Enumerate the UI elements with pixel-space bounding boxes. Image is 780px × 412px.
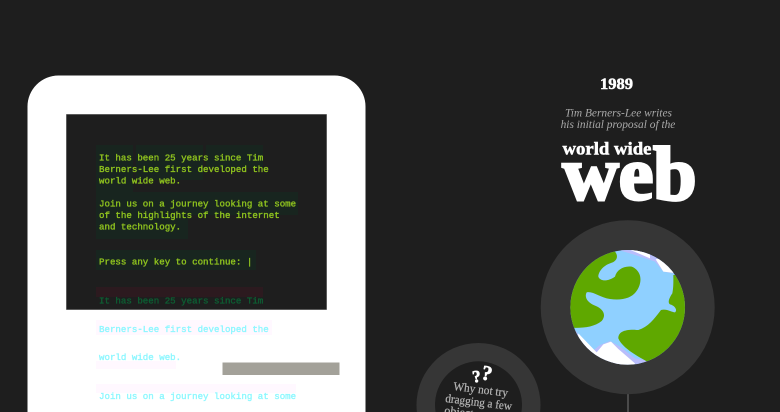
ghost text below screen: world wide web. [99, 352, 181, 363]
ghost text below screen [96, 320, 296, 402]
ghost text below screen: Berners-Lee first developed the [99, 324, 269, 335]
panel: retro computer monitor [28, 76, 366, 412]
icon: question marks [471, 360, 495, 387]
title: world wide web: web [562, 132, 696, 216]
screen intro text: It has been 25 years since Tim [99, 152, 264, 164]
screen intro text: Berners-Lee first developed the [99, 164, 269, 175]
screen intro text [99, 152, 296, 268]
callout text [444, 379, 513, 412]
globe ring [541, 220, 715, 394]
monitor screen [66, 114, 326, 310]
callout inner disc [435, 361, 522, 412]
disk drive slot [222, 362, 340, 375]
screen intro text: world wide web. [99, 176, 181, 186]
year heading: 1989 [600, 76, 633, 93]
connector line [627, 394, 629, 412]
title: world wide web: world wide [562, 138, 652, 158]
intro text: Tim Berners-Lee writes [565, 108, 673, 120]
icon: globe in ring [541, 220, 715, 394]
icon: question marks: ? [479, 360, 495, 386]
intro text [561, 108, 675, 131]
icon: question marks: ? [471, 367, 482, 387]
screen intro text: Join us on a journey looking at some [99, 198, 296, 210]
callout text: Why not try [453, 379, 509, 400]
globe [570, 250, 685, 365]
callout ring [416, 343, 540, 412]
callout: dragging hint [416, 343, 540, 412]
screen intro text: of the highlights of the internet [99, 210, 280, 221]
screen text glow blocks [96, 145, 298, 270]
monitor casing [28, 76, 366, 412]
scrolling ghost text on screen [96, 287, 264, 306]
screen intro text: Press any key to continue: | [99, 256, 252, 268]
screen intro text: and technology. [99, 222, 181, 232]
scrolling ghost text on screen: It has been 25 years since Tim [99, 296, 264, 306]
ghost text below screen: Join us on a journey looking at some [99, 391, 296, 402]
intro text: his initial proposal of the [561, 119, 675, 131]
